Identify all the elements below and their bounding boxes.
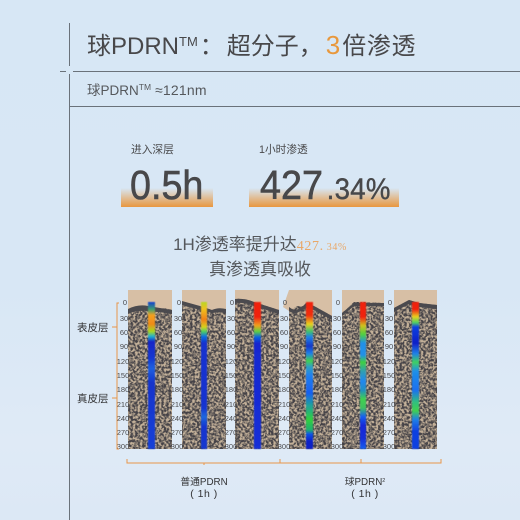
depth axis labels: 270 [278, 428, 290, 437]
skin sample 2 [182, 290, 226, 449]
depth axis labels: 300 [331, 442, 343, 451]
depth axis labels: 150 [225, 371, 237, 380]
depth axis labels: 300 [117, 442, 129, 451]
depth axis labels: 180 [225, 385, 237, 394]
group label: spherical PDRN: 球PDRN2 [345, 477, 385, 488]
group label: regular PDRN: ( 1h ) [190, 488, 218, 500]
depth axis labels: 240 [225, 414, 237, 423]
depth axis labels: 120 [171, 357, 183, 366]
headline: 1H渗透率提升达427. 34% [173, 235, 347, 254]
depth axis labels: 30 [174, 314, 182, 323]
depth axis labels: 180 [331, 385, 343, 394]
depth axis labels: 150 [383, 371, 395, 380]
headline: 真渗透真吸收 [209, 260, 311, 279]
depth axis labels: 120 [225, 357, 237, 366]
depth axis labels: 120 [117, 357, 129, 366]
stat value: penetration: 427.34% [260, 162, 391, 208]
depth axis labels: 30 [227, 314, 235, 323]
group label: regular PDRN: 普通PDRN [180, 477, 228, 488]
skin sample 5 [342, 290, 384, 449]
depth axis labels: 90 [280, 342, 288, 351]
depth axis labels: 300 [383, 442, 395, 451]
depth axis labels: 0 [177, 298, 181, 307]
depth axis labels: 120 [331, 357, 343, 366]
depth axis labels: 30 [120, 314, 128, 323]
skin sample 1 [128, 290, 172, 449]
depth axis labels: 180 [278, 385, 290, 394]
depth axis labels: 30 [280, 314, 288, 323]
layer label: dermis: 真皮层 [77, 392, 108, 405]
depth axis labels: 150 [117, 371, 129, 380]
depth axis labels: 0 [336, 298, 340, 307]
depth axis labels [117, 298, 395, 451]
subtitle: particle size: 球PDRNTM ≈121nm [87, 82, 207, 98]
depth axis labels: 270 [117, 428, 129, 437]
depth axis labels: 0 [388, 298, 392, 307]
depth axis labels: 60 [333, 328, 341, 337]
depth axis labels: 30 [385, 314, 393, 323]
depth axis labels: 270 [331, 428, 343, 437]
depth axis labels: 270 [171, 428, 183, 437]
depth axis labels: 240 [171, 414, 183, 423]
depth axis labels: 90 [120, 342, 128, 351]
depth axis labels: 60 [385, 328, 393, 337]
stat: depth [121, 144, 213, 208]
depth axis labels: 90 [333, 342, 341, 351]
depth axis labels: 150 [331, 371, 343, 380]
skin sample 3 [235, 290, 279, 449]
stat highlight bar: penetration [249, 188, 399, 207]
depth axis labels: 120 [383, 357, 395, 366]
chart: penetration depth comparison [77, 290, 442, 465]
stat label: depth: 进入深层 [131, 144, 174, 156]
depth axis labels: 210 [278, 400, 290, 409]
stat highlight bar: depth [121, 188, 213, 207]
depth axis labels: 150 [278, 371, 290, 380]
depth axis labels: 90 [227, 342, 235, 351]
depth axis labels: 180 [117, 385, 129, 394]
depth axis labels: 240 [383, 414, 395, 423]
depth axis labels: 300 [225, 442, 237, 451]
depth axis labels: 60 [174, 328, 182, 337]
sample group bracket [127, 459, 441, 466]
depth axis labels: 60 [280, 328, 288, 337]
depth axis labels: 0 [123, 298, 127, 307]
headline [173, 235, 347, 279]
depth axis labels: 240 [331, 414, 343, 423]
depth axis labels: 150 [171, 371, 183, 380]
depth axis labels: 300 [278, 442, 290, 451]
skin layer bracket [112, 303, 119, 449]
group label: regular PDRN [180, 476, 228, 500]
depth axis labels: 0 [230, 298, 234, 307]
depth axis labels: 300 [171, 442, 183, 451]
depth axis labels: 0 [283, 298, 287, 307]
depth axis labels: 210 [225, 400, 237, 409]
title: 球PDRNTM：超分子，3倍渗透 [87, 30, 416, 60]
depth axis labels: 210 [383, 400, 395, 409]
depth axis labels: 60 [120, 328, 128, 337]
depth axis labels: 210 [331, 400, 343, 409]
group label: spherical PDRN: ( 1h ) [351, 488, 379, 500]
depth axis labels: 90 [385, 342, 393, 351]
depth axis labels: 30 [333, 314, 341, 323]
depth axis labels: 120 [278, 357, 290, 366]
layer label: epidermis: 表皮层 [77, 321, 108, 334]
depth axis labels: 60 [227, 328, 235, 337]
group label: spherical PDRN [345, 476, 385, 500]
depth axis labels: 180 [383, 385, 395, 394]
skin sample 6 [394, 290, 437, 449]
stat: one hour penetration [249, 144, 399, 208]
stat value: depth: 0.5h [130, 162, 203, 208]
depth axis labels: 270 [225, 428, 237, 437]
depth axis labels: 180 [171, 385, 183, 394]
depth axis labels: 90 [174, 342, 182, 351]
depth axis labels: 240 [117, 414, 129, 423]
stat label: penetration: 1小时渗透 [259, 144, 308, 156]
depth axis labels: 240 [278, 414, 290, 423]
depth axis labels: 210 [171, 400, 183, 409]
skin sample 4 [283, 290, 332, 449]
depth axis labels: 210 [117, 400, 129, 409]
depth axis labels: 270 [383, 428, 395, 437]
